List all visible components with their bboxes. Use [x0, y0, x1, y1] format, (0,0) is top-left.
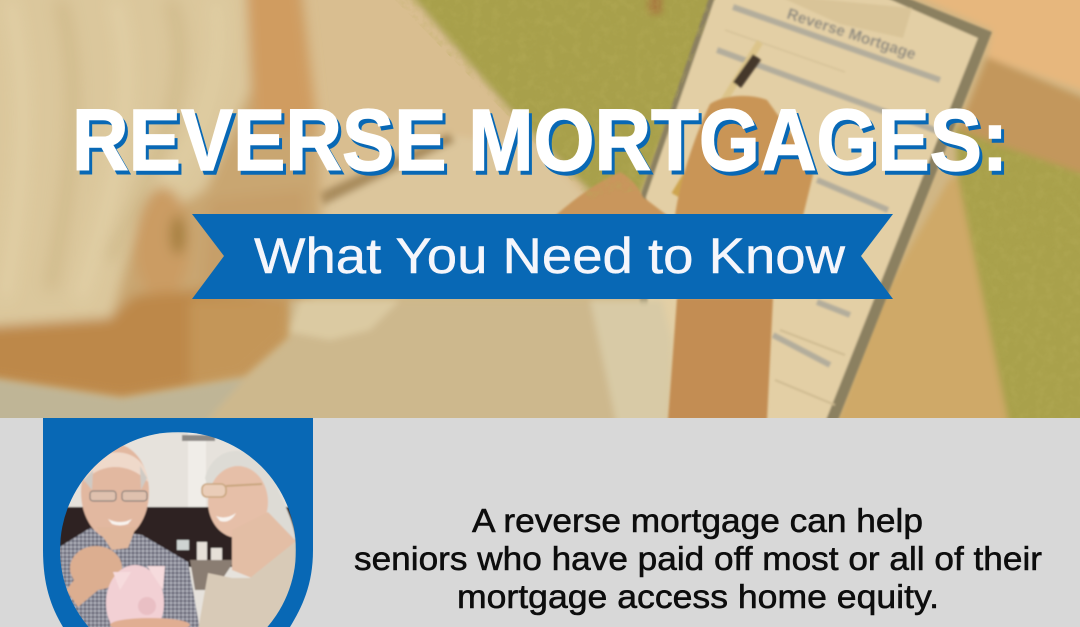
photo: carpet texture [402, 0, 710, 181]
photo: shirt [0, 300, 672, 440]
piggy bank [106, 565, 164, 627]
subtitle ribbon: What You Need to Know [254, 228, 846, 284]
intro text: seniors who have paid off most or all of their [354, 540, 1042, 577]
photo: hair streaks [5, 0, 218, 300]
circular photo [58, 432, 296, 627]
intro text: mortgage access home equity. [457, 578, 939, 615]
woman [205, 451, 296, 545]
photo: clipboard and form [640, 0, 992, 420]
subtitle ribbon [192, 214, 893, 299]
photo badge: seniors with piggy bank [43, 418, 313, 627]
intro text [354, 502, 1042, 615]
blue shield [43, 418, 313, 627]
photo: carpet, table, sofa [296, 0, 1080, 440]
form heading: Reverse Mortgage [785, 6, 918, 63]
intro text: A reverse mortgage can help [472, 502, 923, 539]
hero photo: senior man filling in a reverse mortgage form [0, 0, 1080, 440]
photo: hands and pen [555, 42, 813, 420]
man [58, 528, 200, 627]
lower panel background [0, 418, 1080, 627]
photo: head, hair and neck [0, 0, 322, 399]
